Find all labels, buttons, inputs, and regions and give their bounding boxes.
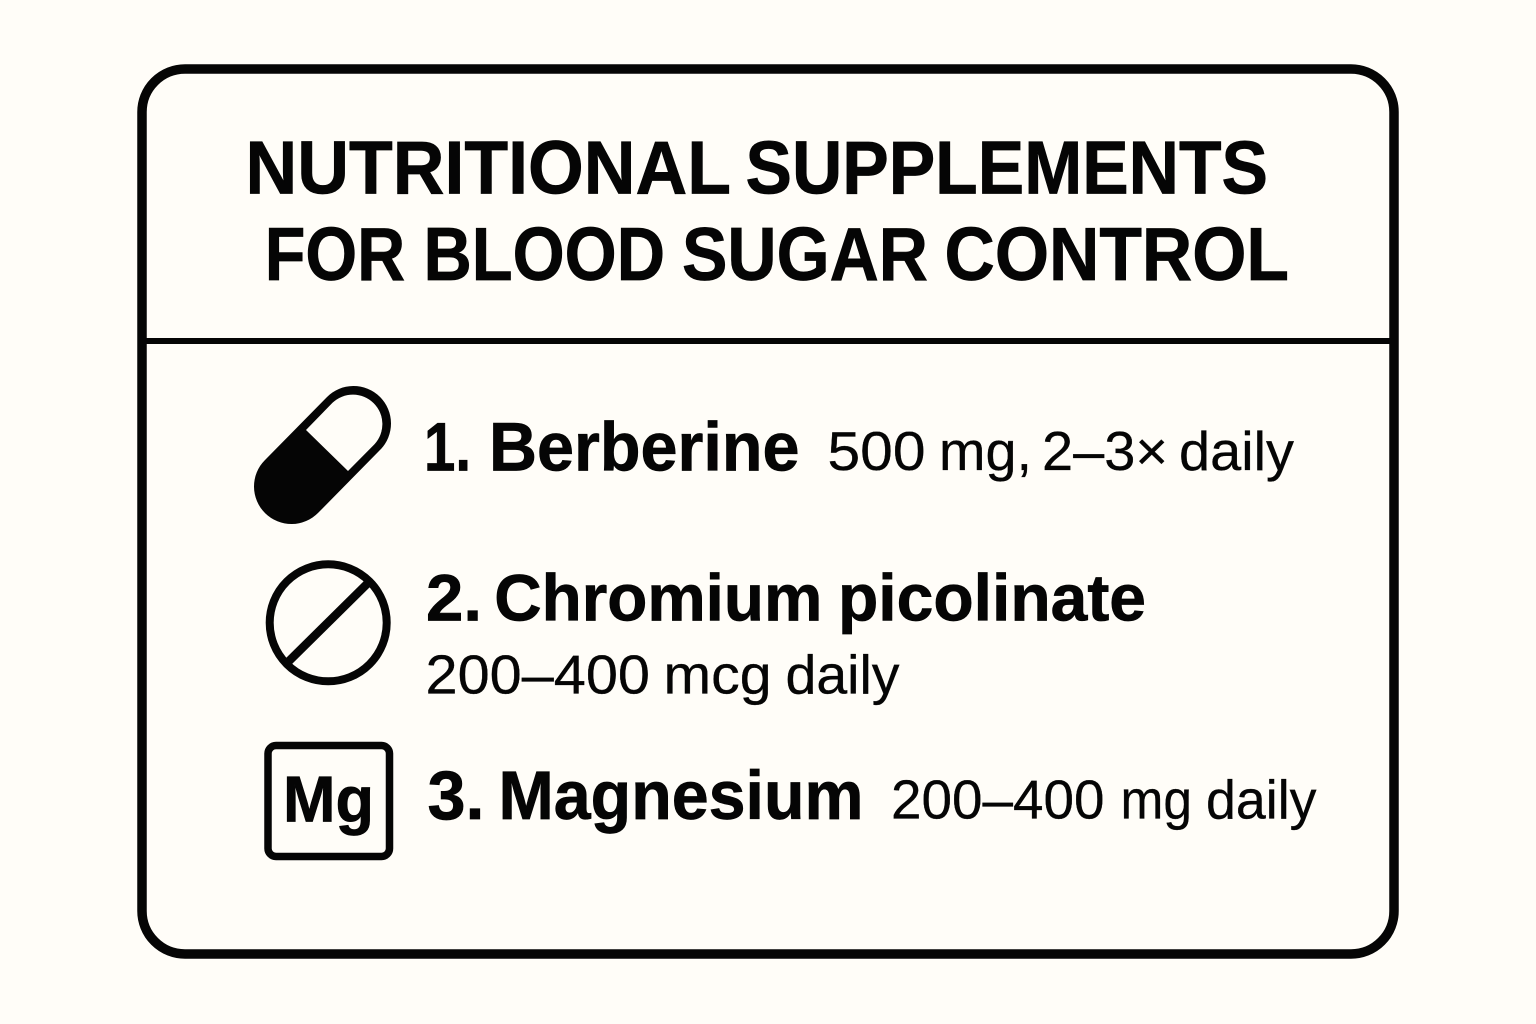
icon: capsule: [292, 395, 382, 486]
title: SUPPLEMENTS: [746, 126, 1268, 210]
panel: main card: [142, 69, 1394, 954]
item 2: Chromium picolinate: [426, 560, 1146, 706]
item 3: Magnesium: mg: [1120, 768, 1192, 830]
item 2: Chromium picolinate: daily: [786, 644, 900, 706]
item 2: Chromium picolinate: 2.: [426, 560, 482, 634]
item 3: Magnesium: 200–400: [891, 768, 1104, 830]
item 3: Magnesium: 3.: [428, 757, 484, 834]
item 2: Chromium picolinate: 200–400: [426, 644, 650, 706]
item 2: Chromium picolinate: mcg: [664, 644, 772, 706]
item 3: Magnesium: [428, 757, 1317, 834]
title: [246, 126, 1289, 296]
icon: tablet: [270, 564, 387, 681]
title: NUTRITIONAL: [246, 126, 731, 210]
icon: magnesium box: [268, 746, 390, 856]
icon: magnesium box: Mg: [283, 763, 374, 836]
title: BLOOD: [424, 212, 665, 296]
item 1: Berberine: [424, 408, 1294, 486]
title: FOR: [265, 212, 405, 296]
item 1: Berberine: Berberine: [489, 408, 800, 486]
item 3: Magnesium: daily: [1206, 768, 1317, 830]
item 1: Berberine: 2–3×: [1042, 420, 1168, 482]
item 1: Berberine: daily: [1179, 420, 1294, 482]
title: CONTROL: [944, 212, 1289, 296]
title: SUGAR: [682, 212, 928, 296]
item 1: Berberine: mg,: [939, 420, 1032, 482]
item 1: Berberine: 500: [828, 420, 926, 482]
item 2: Chromium picolinate: picolinate: [838, 560, 1146, 634]
item 3: Magnesium: Magnesium: [498, 757, 864, 834]
item 1: Berberine: 1.: [424, 408, 471, 486]
item 2: Chromium picolinate: Chromium: [494, 560, 822, 634]
